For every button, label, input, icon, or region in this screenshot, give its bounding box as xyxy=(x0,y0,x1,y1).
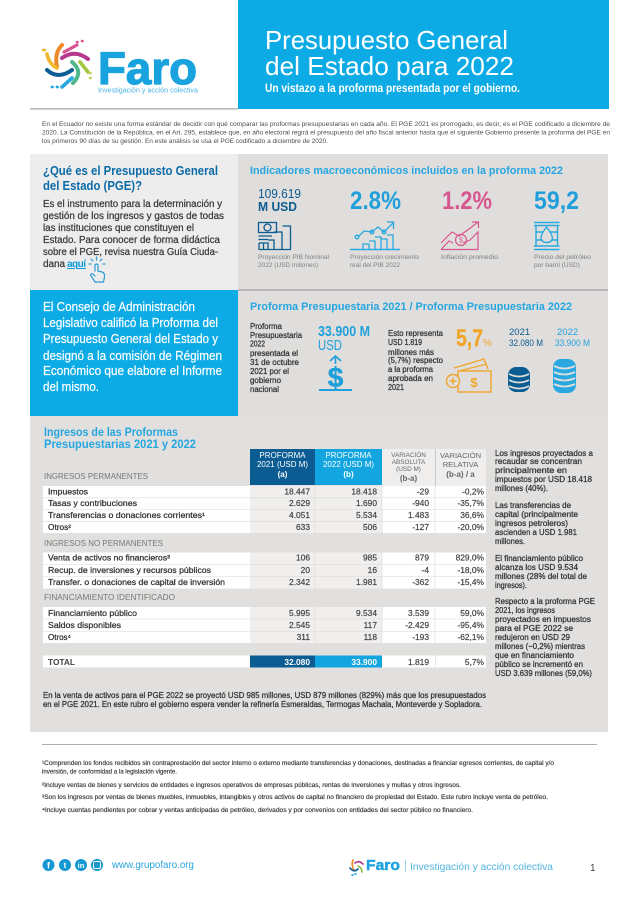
stat: 5,7%: 5,7 xyxy=(456,325,483,352)
table header xyxy=(250,449,486,486)
table header: PROFORMA xyxy=(325,451,372,460)
section: ingresos no permanentes xyxy=(43,539,486,588)
table header: VARIACIÓN xyxy=(391,450,426,459)
body text: Es el instrumento para la determinación y xyxy=(43,199,222,210)
text: esto representa: (5,7%) respecto xyxy=(388,356,444,365)
panel: consejo de administracion: Presupuesto General del Estado y xyxy=(43,331,218,346)
footer social icons: in xyxy=(78,861,85,870)
section: ingresos permanentes: INGRESOS PERMANENTES xyxy=(44,472,148,481)
text: esto representa: 2021 xyxy=(388,383,404,392)
body text: dana xyxy=(43,259,65,270)
text: venta de activos xyxy=(43,691,486,709)
table header: 2022 (USD M) xyxy=(323,460,374,469)
panel: consejo de administracion xyxy=(30,290,238,416)
caption: 2022 (USD millones) xyxy=(258,263,318,269)
indicator: crecimiento xyxy=(350,187,420,269)
logo: Faro: Faro xyxy=(98,43,197,94)
section: financiamiento identificado: 5.995 xyxy=(289,608,310,618)
page number: 1 xyxy=(590,863,596,874)
heading: Ingresos de las Proformas xyxy=(44,427,178,439)
section: ingresos permanentes xyxy=(43,472,486,533)
icon: growth chart xyxy=(350,222,400,250)
indicator: petroleo xyxy=(534,187,592,269)
table header: (b-a) xyxy=(400,474,418,483)
stat: 5,7%: % xyxy=(483,338,492,349)
section: ingresos no permanentes: -15,4% xyxy=(457,577,485,587)
row: total: 1.819 xyxy=(408,657,429,667)
logo: Faro xyxy=(43,41,198,94)
section: financiamiento identificado: -193 xyxy=(412,632,429,642)
footer logo xyxy=(350,857,553,875)
footer website: www.grupofaro.org xyxy=(111,860,194,871)
section: ingresos permanentes: 1.483 xyxy=(408,510,429,520)
body text: gestión de los ingresos y gastos de todas xyxy=(43,211,224,222)
section: financiamiento identificado: 117 xyxy=(364,620,377,630)
section: financiamiento identificado: 118 xyxy=(364,632,377,642)
icon: money plus: $ xyxy=(470,375,478,390)
section: ingresos no permanentes: INGRESOS NO PERMANENTES xyxy=(44,539,163,548)
section: ingresos permanentes: 18.447 xyxy=(284,486,310,496)
text: sidebar comentarios: ascienden a USD 1.981 xyxy=(495,528,578,537)
section: ingresos permanentes: -127 xyxy=(412,522,429,532)
icon: database 2021 xyxy=(508,367,530,392)
heading: Presupuestarias 2021 y 2022 xyxy=(44,439,196,451)
panel: proforma 2021 / 2022 xyxy=(238,290,608,416)
section: financiamiento identificado: FINANCIAMIENTO IDENTIFICADO xyxy=(44,593,175,602)
section: ingresos permanentes: -940 xyxy=(412,498,429,508)
panel: consejo de administracion: Económico que elabore el Informe xyxy=(43,363,222,378)
section: financiamiento identificado: 59,0% xyxy=(460,608,485,618)
indicator: PIB nominal: 109.619 xyxy=(258,186,301,201)
text: proforma presentada: 31 de octubre xyxy=(250,358,300,367)
table header: (USD M) xyxy=(396,466,421,473)
text: proforma presentada: 2022 xyxy=(250,340,265,348)
row: total: 33.900 xyxy=(351,657,377,667)
section: financiamiento identificado: 9.534 xyxy=(356,608,377,618)
indicator: inflacion xyxy=(441,187,499,261)
body text: sobre el PGE, revisa nuestra Guía Ciuda- xyxy=(43,247,218,258)
text: sidebar comentarios: proyectados en impuestos xyxy=(495,615,591,624)
panel: consejo de administracion: del mismo. xyxy=(43,379,99,394)
text: sidebar comentarios xyxy=(495,449,595,678)
text: proforma presentada: Proforma xyxy=(250,322,283,331)
indicator: PIB nominal: M USD xyxy=(258,199,297,214)
indicator: PIB nominal xyxy=(258,186,329,269)
text: sidebar comentarios: millones (−0,2%) mientras xyxy=(495,642,585,651)
table header: 2021 (USD M) xyxy=(257,460,308,469)
text: sidebar comentarios: que en financiamiento xyxy=(495,651,575,660)
footer social icons: f xyxy=(47,860,51,870)
values: 2021: 32.080 M xyxy=(509,338,543,349)
text: proforma presentada: presentada el xyxy=(250,349,298,358)
section: financiamiento identificado: 2.545 xyxy=(289,620,310,630)
text: sidebar comentarios: ingresos). xyxy=(495,581,527,590)
text: sidebar comentarios: USD 3.639 millones (59,0%) xyxy=(495,669,592,678)
text: esto representa: a la proforma xyxy=(388,365,434,374)
icon: money plus xyxy=(446,359,491,392)
text: sidebar comentarios: recaudar se concentran xyxy=(495,457,582,466)
subtitle: Un vistazo a la proforma presentada por el gobierno. xyxy=(265,83,520,95)
panel: indicadores macroeconomicos xyxy=(238,154,608,290)
table header: ABSOLUTA xyxy=(392,459,426,466)
footer logo: Faro xyxy=(366,857,400,874)
section: financiamiento identificado: Saldos disponibles xyxy=(48,621,121,630)
text: sidebar comentarios: millones (28% del total de xyxy=(495,572,588,581)
indicator: inflacion: 1.2% xyxy=(442,187,492,215)
caption: Inflación promedio xyxy=(441,255,499,261)
panel: consejo de administracion: Legislativo calificó la Proforma del xyxy=(43,315,218,330)
logo: Faro: Investigación y acción colectiva xyxy=(98,88,198,94)
section: ingresos permanentes: -35,7% xyxy=(457,498,485,508)
footer social icons xyxy=(42,859,103,871)
stat: 33.900 M USD xyxy=(318,323,370,354)
section: ingresos no permanentes: 2.342 xyxy=(289,577,310,587)
footnotes: ¹Comprenden los fondos recibidos sin contraprestación del sector interno o externo mediante transferencias y donaciones, destinadas a financiar egresos corrientes, de capital y/o xyxy=(42,760,554,767)
body text xyxy=(43,199,224,270)
text: sidebar comentarios: impuestos por USD 18.418 xyxy=(495,475,593,484)
section: ingresos no permanentes: Venta de activos no financieros³ xyxy=(48,554,170,562)
indicator: petroleo: 59,2 xyxy=(534,187,579,215)
section: ingresos no permanentes: 1.981 xyxy=(356,577,377,587)
heading: del Estado (PGE)? xyxy=(43,178,142,193)
section: financiamiento identificado: -2.429 xyxy=(405,620,429,630)
caption: real del PIB 2022 xyxy=(350,263,401,269)
section: financiamiento identificado: -95,4% xyxy=(457,620,485,630)
section: ingresos permanentes: 18.418 xyxy=(351,486,377,496)
section: ingresos no permanentes: 106 xyxy=(296,552,310,562)
icon: dollar rising xyxy=(319,356,352,393)
footnotes: ⁴Incluye cuentas pendientes por cobrar y ventas anticipadas de petróleo, derivados y por convenios con entidades del sector público no financiero. xyxy=(42,807,473,814)
section: ingresos permanentes: Tasas y contribuciones xyxy=(48,499,137,508)
values: 2022 xyxy=(555,327,590,349)
text: sidebar comentarios: Respecto a la proforma PGE xyxy=(495,597,595,606)
icon: oil barrel xyxy=(534,222,560,250)
caption xyxy=(534,255,592,269)
section: ingresos no permanentes: 829,0% xyxy=(456,552,485,562)
section: financiamiento identificado: 311 xyxy=(297,632,310,642)
section: ingresos no permanentes: Transfer. o donaciones de capital de inversión xyxy=(48,578,225,587)
table header: PROFORMA xyxy=(259,451,306,460)
table: ingresos xyxy=(43,449,486,668)
title: del Estado para 2022 xyxy=(265,51,514,81)
heading xyxy=(44,427,196,451)
section: financiamiento identificado: Otros⁴ xyxy=(48,633,71,642)
body text: Estado. Para conocer de forma didáctica xyxy=(43,235,220,246)
row: total: 5,7% xyxy=(465,657,485,667)
section: ingresos permanentes: -0,2% xyxy=(462,486,485,496)
text: proforma presentada: gobierno xyxy=(250,376,282,385)
text: proforma presentada: 2021 por el xyxy=(250,367,289,376)
section: ingresos permanentes: Impuestos xyxy=(48,488,88,496)
text: sidebar comentarios: ingresos petroleros) xyxy=(495,519,568,528)
text: sidebar comentarios: Los ingresos proyectados a xyxy=(495,449,594,458)
section: ingresos permanentes: 5.534 xyxy=(356,510,377,520)
intro text: los primeros 90 días de su gestión. En este análisis se usa el PGE codificado a diciembre de 2020. xyxy=(42,138,328,145)
section: ingresos no permanentes: 985 xyxy=(363,552,377,562)
body text: aquí xyxy=(67,259,87,270)
heading: Proforma Presupuestaria 2021 / Proforma Presupuestaria 2022 xyxy=(250,301,572,313)
text: sidebar comentarios: público se incrementó en xyxy=(495,660,583,669)
text: sidebar comentarios: alcanza los USD 9.534 xyxy=(495,563,579,572)
values: 2022: 2022 xyxy=(557,327,578,338)
caption: por barril (USD) xyxy=(534,263,580,269)
intro text xyxy=(42,121,610,145)
icon: database 2022 xyxy=(553,359,576,393)
caption: Precio del petróleo xyxy=(534,255,592,261)
text: venta de activos: En la venta de activos para el PGE 2022 se proyectó USD 985 millones, USD 879 millones (829%) más que los presupuestados xyxy=(43,691,486,700)
section: ingresos no permanentes: Recup. de inversiones y recursos públicos xyxy=(48,566,211,575)
footnotes: ³Son los ingresos por ventas de bienes muebles, inmuebles, intangibles y otros activos de capital no financiero de propiedad del Estado. Este rubro incluye venta de petróleo. xyxy=(42,794,548,801)
text: sidebar comentarios: millones. xyxy=(495,537,525,546)
stat: 33.900 M USD: USD xyxy=(318,337,342,354)
row: total: TOTAL xyxy=(48,657,75,667)
section: ingresos permanentes: 506 xyxy=(363,522,377,532)
icon: dollar rising: $ xyxy=(328,362,344,393)
heading: ¿Qué es el Presupuesto General xyxy=(43,163,218,178)
title xyxy=(265,25,514,81)
row: total: 32.080 xyxy=(284,657,310,667)
section: financiamiento identificado xyxy=(43,593,486,643)
section: ingresos permanentes: 1.690 xyxy=(356,498,377,508)
footnotes: inversión, de conformidad a la legislación vigente. xyxy=(42,768,177,776)
section: ingresos no permanentes: 879 xyxy=(415,552,429,562)
section: ingresos permanentes: 633 xyxy=(296,522,310,532)
row: total xyxy=(43,656,486,668)
text: sidebar comentarios: redujeron en USD 29 xyxy=(495,633,571,642)
footnotes xyxy=(42,744,597,814)
heading xyxy=(43,163,218,193)
section: ingresos no permanentes: 20 xyxy=(301,565,310,575)
text: venta de activos: en el PGE 2021. En este rubro el gobierno espera vender la refinería Esmeraldas, Termogas Machala, Monteverde y Sopladora. xyxy=(43,700,482,709)
table header: RELATIVA xyxy=(443,460,479,469)
text: esto representa: Esto representa xyxy=(388,329,444,338)
section: ingresos permanentes: Transferencias o donaciones corrientes¹ xyxy=(48,511,205,520)
body text: las instituciones que constituyen el xyxy=(43,223,194,234)
table header: (a) xyxy=(278,470,288,479)
section: ingresos no permanentes: 16 xyxy=(368,565,377,575)
section: ingresos permanentes: -29 xyxy=(417,486,429,496)
text: sidebar comentarios: 2021, los ingresos xyxy=(495,606,555,615)
section: ingresos no permanentes: -4 xyxy=(422,565,429,575)
footer social icons: t xyxy=(64,861,67,870)
text: sidebar comentarios: El financiamiento público xyxy=(495,554,584,563)
panel: consejo de administracion: El Consejo de Administración xyxy=(43,299,195,314)
header banner xyxy=(30,0,609,109)
text: proforma presentada: Presupuestaria xyxy=(250,331,303,340)
caption xyxy=(258,255,329,269)
footnotes: ²Incluye ventas de bienes y servicios de entidades e ingresos operativos de empresas públicas, rentas de inversiones y multas y otros ingresos. xyxy=(42,782,461,789)
table header: VARIACIÓN xyxy=(440,451,481,460)
caption: Proyección crecimiento xyxy=(350,255,420,261)
intro text: En el Ecuador no existe una forma estándar de decidir con qué comparar las proformas presupuestarias en cada año. El PGE 2021 es prorrogado, es decir, es el PGE codificado a diciembre de xyxy=(42,121,610,128)
table header: (b-a) / a xyxy=(446,470,475,479)
table header: (b) xyxy=(343,470,354,479)
values: 2021 xyxy=(509,327,543,349)
icon: pointing hand xyxy=(89,257,105,282)
heading: Indicadores macroeconómicos incluidos en la proforma 2022 xyxy=(250,165,563,177)
caption: Proyección PIB Nominal xyxy=(258,255,329,261)
icon: banknote and bars xyxy=(258,222,291,250)
text: proforma presentada: nacional xyxy=(250,385,279,394)
section: financiamiento identificado: -62,1% xyxy=(457,632,485,642)
caption xyxy=(350,255,420,269)
text: sidebar comentarios: principalmente en xyxy=(495,466,567,475)
section: ingresos permanentes: 4.051 xyxy=(289,510,310,520)
footer logo: Investigación y acción colectiva xyxy=(410,861,553,873)
section: ingresos permanentes: 2.629 xyxy=(289,498,310,508)
text: esto representa: millones más xyxy=(388,348,434,357)
values: 2021: 2021 xyxy=(509,327,530,338)
panel: que es el PGE xyxy=(30,154,238,290)
text: sidebar comentarios: capital (principalmente xyxy=(495,510,579,519)
stat: 33.900 M USD: 33.900 M xyxy=(318,323,370,340)
title: Presupuesto General xyxy=(265,25,508,55)
text: sidebar comentarios: para el PGE 2022 se xyxy=(495,624,574,633)
section: ingresos no permanentes: -362 xyxy=(412,577,429,587)
section: financiamiento identificado: Financiamiento público xyxy=(48,609,137,618)
intro text: 2020. La Constitución de la República, en el Art. 295, establece que, en año electoral regirá el presupuesto del año fiscal anterior hasta que el siguiente Gobierno presente la proforma del PGE en xyxy=(42,130,610,136)
icon: inflation chart: $ xyxy=(459,238,463,244)
section: ingresos no permanentes: -18,0% xyxy=(457,565,485,575)
values: 2022: 33.900 M xyxy=(555,338,590,349)
section: ingresos permanentes: 36,6% xyxy=(460,510,485,520)
text: esto representa: USD 1.819 xyxy=(388,338,422,347)
text: esto representa xyxy=(388,329,444,392)
text: sidebar comentarios: Las transferencias de xyxy=(495,501,572,510)
panel: consejo de administracion: designó a la comisión de Régimen xyxy=(43,348,222,363)
section: ingresos permanentes: -20,0% xyxy=(457,522,485,532)
text: proforma presentada xyxy=(250,322,303,394)
indicator: crecimiento: 2.8% xyxy=(350,187,401,215)
text: sidebar comentarios: millones (40%). xyxy=(495,484,548,493)
section: financiamiento identificado: 3.539 xyxy=(408,608,429,618)
section: ingresos permanentes: Otros² xyxy=(48,523,71,532)
panel: ingresos xyxy=(30,416,608,732)
text: esto representa: aprobada en xyxy=(388,374,433,383)
